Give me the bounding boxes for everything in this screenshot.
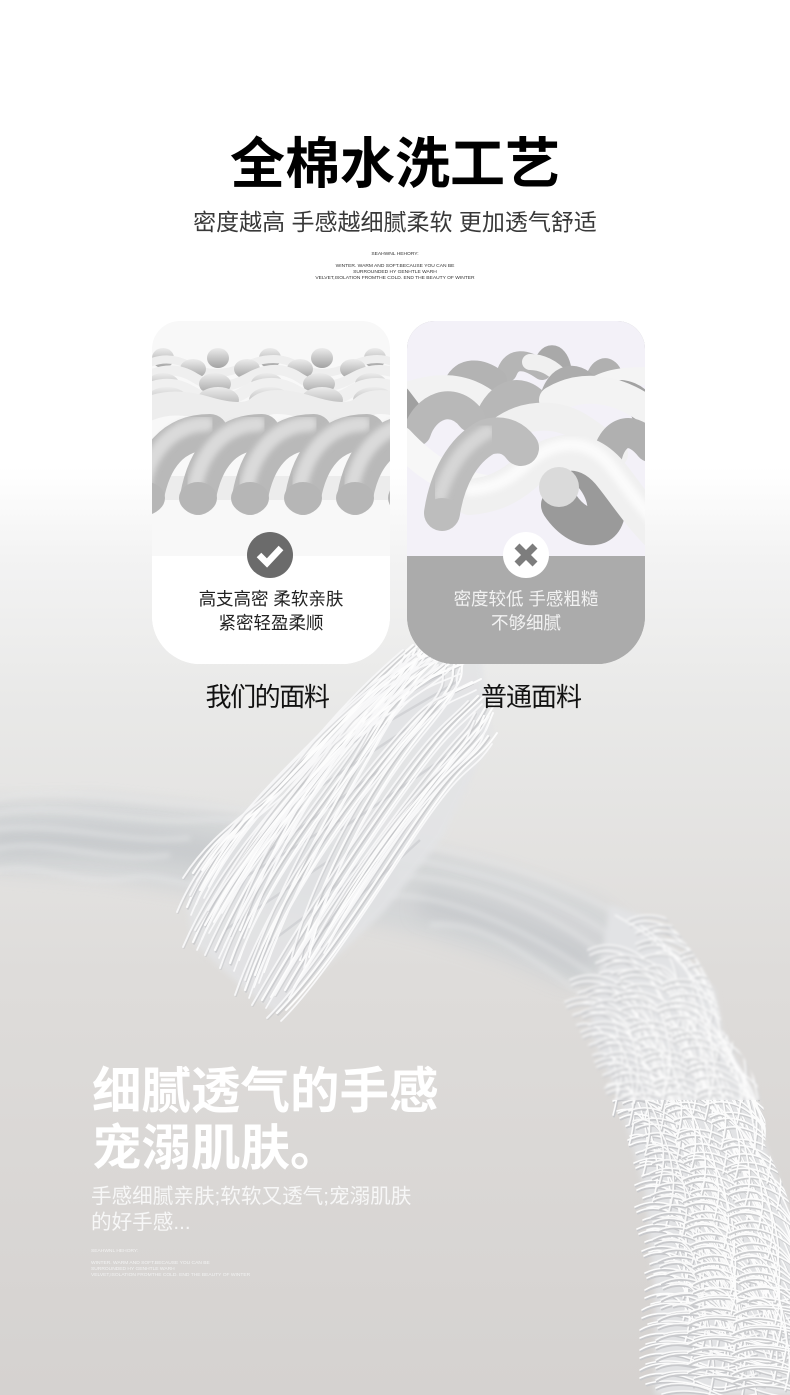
small English caption: SEAHWNL HEHORY: WINTER. WARM AND SOFT.BECAUSE YOU CAN BE SURROUNDED HY GENHTLE WARH VELVET,ISOLATION FROMTHE COLD. END THE BEAUTY OF WINTER: [315, 252, 475, 281]
bottom heading: 细腻透气的手感: [92, 1064, 438, 1119]
fabric image: loose weave: [407, 321, 645, 664]
icon: check badge: [247, 532, 293, 578]
our fabric description: [199, 589, 343, 633]
bottom body text: 手感细腻亲肤;软软又透气;宠溺肌肤: [91, 1185, 411, 1208]
white thread bundle: [177, 642, 497, 1021]
bottom small English caption: SEAHWNL HEHORY: WINTER. WARM AND SOFT.BECAUSE YOU CAN BE SURROUNDED HY GENHTLE WARH VELVET,ISOLATION FROMTHE COLD. END THE BEAUTY OF WINTER: [91, 1249, 250, 1278]
icon: cross badge: [503, 532, 549, 578]
soft blurred arc of the rope: [0, 794, 630, 1000]
fabric image: dense weave: [152, 348, 390, 515]
bottom body text: [91, 1185, 411, 1234]
ordinary fabric description: 不够细腻: [491, 613, 561, 633]
panel: our fabric: [152, 321, 390, 664]
label: ordinary fabric: 普通面料: [481, 682, 581, 712]
sharp right rope with curly fibres: [565, 905, 790, 1395]
bottom heading: 宠溺肌肤。: [92, 1121, 340, 1176]
bottom body text: 的好手感...: [91, 1211, 191, 1234]
our fabric description: 紧密轻盈柔顺: [218, 613, 324, 633]
background with fibre rope: [0, 528, 790, 1395]
label: our fabric: 我们的面料: [205, 682, 328, 712]
title: 全棉水洗工艺: [230, 133, 560, 195]
panel: ordinary fabric: [407, 321, 645, 664]
subtitle: 密度越高 手感越细腻柔软 更加透气舒适: [193, 209, 597, 235]
ordinary fabric description: [454, 589, 598, 633]
our fabric description: 高支高密 柔软亲肤: [199, 589, 343, 609]
bottom heading: [92, 1064, 438, 1176]
ordinary fabric description: 密度较低 手感粗糙: [454, 589, 598, 609]
